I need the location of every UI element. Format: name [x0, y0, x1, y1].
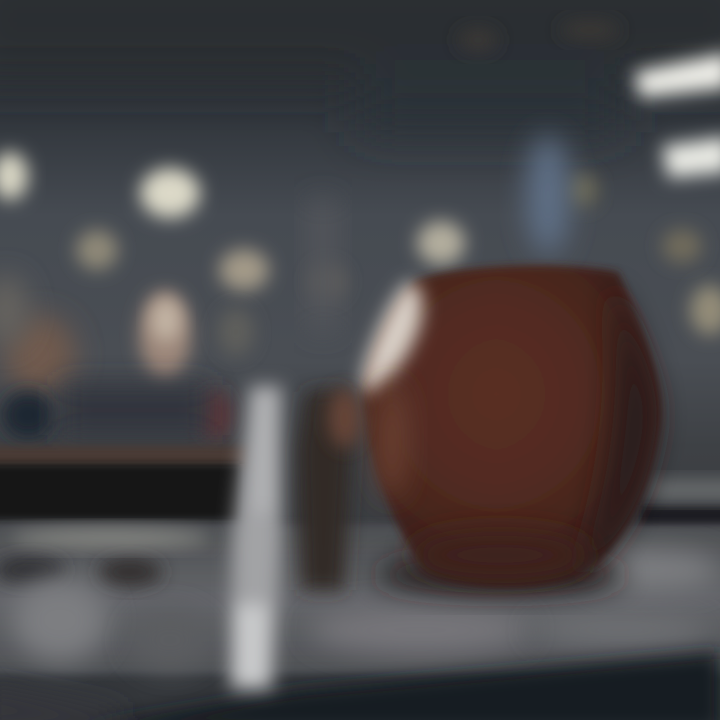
brown bottle: [298, 388, 362, 590]
window lights at right: [634, 52, 720, 178]
brown cup: [362, 265, 661, 587]
ceiling shadow: [0, 0, 720, 130]
cup shaded right side: [575, 280, 657, 578]
cup highlight: [362, 282, 422, 395]
cup left warm reflection: [376, 382, 408, 498]
cup shadow on counter: [375, 557, 625, 593]
bokeh lights: [0, 20, 720, 356]
dark table band: [0, 446, 720, 531]
faint vertical bottle in background: [310, 200, 336, 330]
dark counter edge: [60, 652, 720, 720]
marble counter: [0, 524, 720, 674]
white vertical bar: [230, 385, 282, 690]
cup lower shading: [410, 531, 590, 579]
blue steam: [526, 135, 570, 255]
background figures at left: [0, 275, 231, 439]
